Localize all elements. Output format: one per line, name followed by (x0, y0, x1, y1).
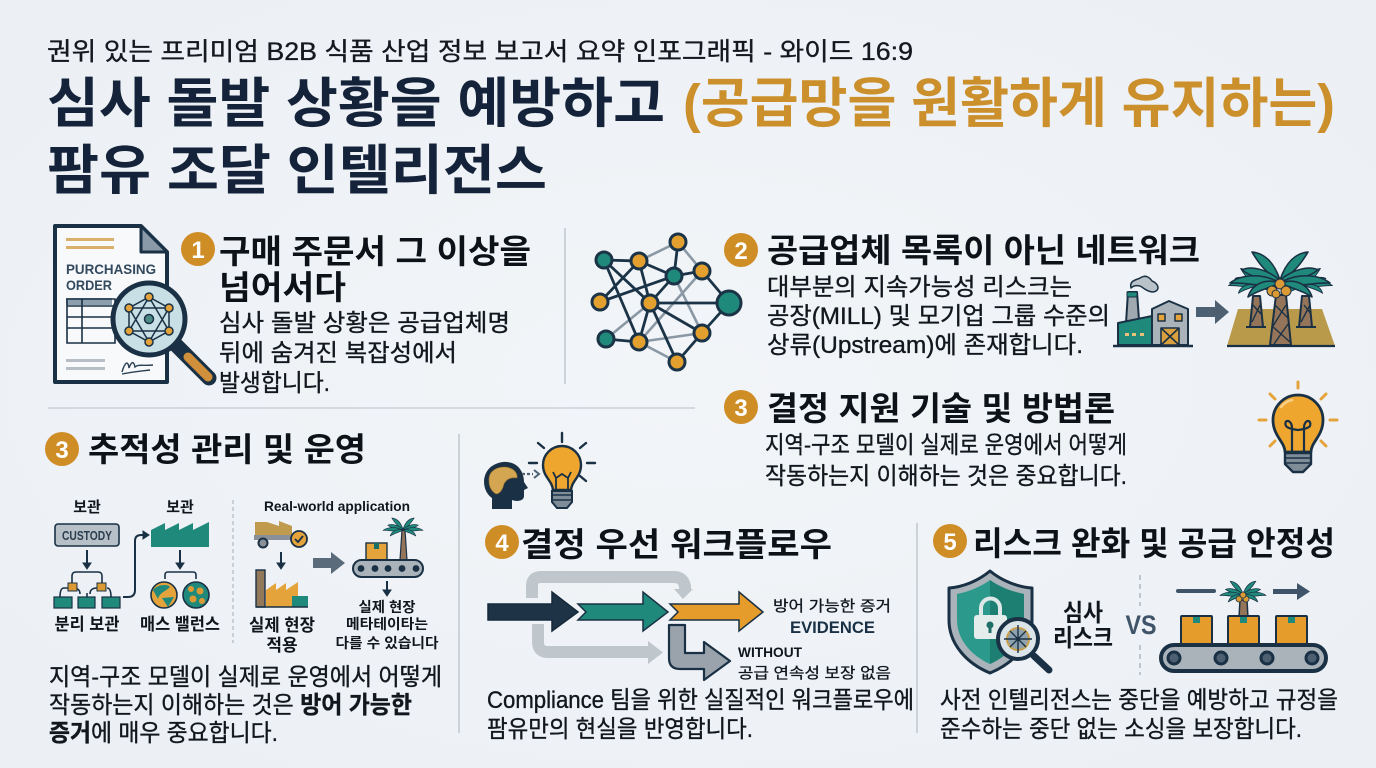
body 4: Compliance 팀을 위한 실질적인 워크플로우에 (487, 687, 914, 714)
icon: conveyor with palm and boxes (1161, 581, 1326, 671)
badge (45, 432, 79, 466)
badge 3 (724, 390, 758, 424)
diagram: truck to factory (249, 521, 315, 655)
icon: purchase order document with magnifier: PURCHASING (66, 261, 156, 277)
body 3: 작동하는지 이해하는 것은 중요합니다. (765, 463, 1127, 490)
label: audit risk (1053, 600, 1113, 652)
panel: 5 risk mitigation (933, 524, 1338, 743)
diagram: truck to factory: 실제 현장 (249, 616, 315, 635)
body 4: 팜유만의 현실을 반영합니다. (487, 716, 753, 743)
subtitle: 권위 있는 프리미엄 B2B 식품 산업 정보 보고서 요약 인포그래픽 - 와이드 16:9 (47, 38, 913, 66)
body 3: 지역-구조 모델이 실제로 운영에서 어떻게 (765, 432, 1127, 459)
arrow: segregation to mass balance (123, 531, 149, 597)
heading: 추적성 관리 및 운영 (88, 431, 366, 468)
icon: factory (1113, 276, 1193, 346)
body: 지역-구조 모델이 실제로 운영에서 어떻게 (49, 664, 442, 691)
diagram: segregation custody: CUSTODY (62, 529, 113, 543)
diagram: mass balance (140, 499, 220, 634)
heading 4: 결정 우선 워크플로우 (521, 526, 832, 563)
icon: shield with lock and magnifier (949, 571, 1049, 673)
label: real-world application: Real-world application (264, 498, 410, 514)
diagram: truck to factory: 적용 (266, 636, 298, 655)
body 5: 사전 인텔리전스는 중단을 예방하고 규정을 (940, 687, 1338, 714)
body 5: 준수하는 중단 없는 소싱을 보장합니다. (940, 716, 1302, 743)
badge 3: 3 (734, 395, 748, 422)
diagram: conveyor with palm: 실제 현장 (358, 599, 416, 615)
arrow: factory to plantation (1196, 300, 1229, 324)
body 2 (767, 274, 1110, 359)
arrow: application to conveyor (313, 552, 345, 574)
panel: 3 traceability (45, 431, 442, 747)
body (49, 664, 442, 747)
body 1: 심사 돌발 상황은 공급업체명 (219, 310, 510, 337)
diagram: mass balance: 매스 밸런스 (140, 615, 220, 634)
badge 5 (933, 524, 967, 558)
icon: supplier network graph (592, 234, 741, 370)
heading 3: 결정 지원 기술 및 방법론 (767, 390, 1115, 427)
panel: 3 decision support (724, 382, 1337, 490)
body 3 (765, 432, 1127, 490)
icon: purchase order document with magnifier: ORDER (66, 277, 112, 293)
body 2: 대부분의 지속가능성 리스크는 (767, 274, 1072, 301)
panel: 1 beyond purchase orders (55, 226, 531, 397)
badge 1 (181, 232, 215, 266)
heading 1: 넘어서다 (219, 269, 346, 306)
title: 팜유 조달 인텔리전스 (47, 141, 547, 201)
icon: light bulb (1259, 382, 1337, 472)
label: versus: VS (1126, 610, 1156, 640)
badge 4 (485, 525, 519, 559)
diagram: workflow arrows: 방어 가능한 증거 (773, 598, 891, 615)
title: 심사 돌발 상황을 예방하고 (47, 74, 665, 134)
body 4 (487, 687, 914, 743)
diagram: workflow arrows: WITHOUT (738, 644, 802, 660)
heading 2: 공급업체 목록이 아닌 네트워크 (767, 232, 1200, 269)
icon: palm plantation (1227, 252, 1335, 346)
icon: head and bulb (484, 433, 595, 509)
heading 1: 구매 주문서 그 이상을 (219, 233, 531, 270)
badge: 3 (55, 437, 69, 464)
title (47, 74, 1335, 201)
diagram: conveyor with palm (336, 518, 439, 651)
badge 2 (724, 233, 758, 267)
diagram: segregation custody: 보관 (73, 499, 101, 516)
title: (공급망을 원활하게 유지하는) (683, 74, 1335, 134)
body: 작동하는지 이해하는 것은 방어 가능한 (49, 692, 412, 719)
heading 1 (219, 233, 531, 306)
badge 2: 2 (734, 238, 748, 265)
panel: 2 network (592, 232, 1335, 370)
diagram: mass balance: 보관 (166, 499, 194, 516)
heading 5: 리스크 완화 및 공급 안정성 (973, 525, 1335, 562)
diagram: segregation custody: 분리 보관 (54, 615, 120, 634)
body 1: 발생합니다. (219, 370, 330, 397)
body 1 (219, 310, 510, 397)
badge 4: 4 (495, 530, 509, 557)
diagram: conveyor with palm: 다를 수 있습니다 (336, 635, 439, 651)
diagram: conveyor with palm: 메타테이타는 (346, 616, 428, 632)
body: 증거에 매우 중요합니다. (49, 720, 278, 747)
diagram: workflow arrows (488, 577, 891, 682)
label: audit risk: 심사 (1063, 600, 1103, 627)
body 5 (940, 687, 1338, 743)
panel: 4 decision-first workflow (484, 433, 914, 743)
diagram: segregation custody (54, 499, 120, 634)
icon: purchase order document with magnifier (55, 226, 209, 382)
diagram: workflow arrows: 공급 연속성 보장 없음 (738, 665, 891, 682)
label: audit risk: 리스크 (1053, 625, 1113, 652)
diagram: workflow arrows: EVIDENCE (790, 618, 875, 637)
badge 5: 5 (943, 529, 957, 556)
body 2: 상류(Upstream)에 존재합니다. (767, 332, 1083, 359)
badge 1: 1 (191, 237, 205, 264)
body 1: 뒤에 숨겨진 복잡성에서 (219, 340, 457, 367)
body 2: 공장(MILL) 및 모기업 그룹 수준의 (767, 303, 1110, 330)
